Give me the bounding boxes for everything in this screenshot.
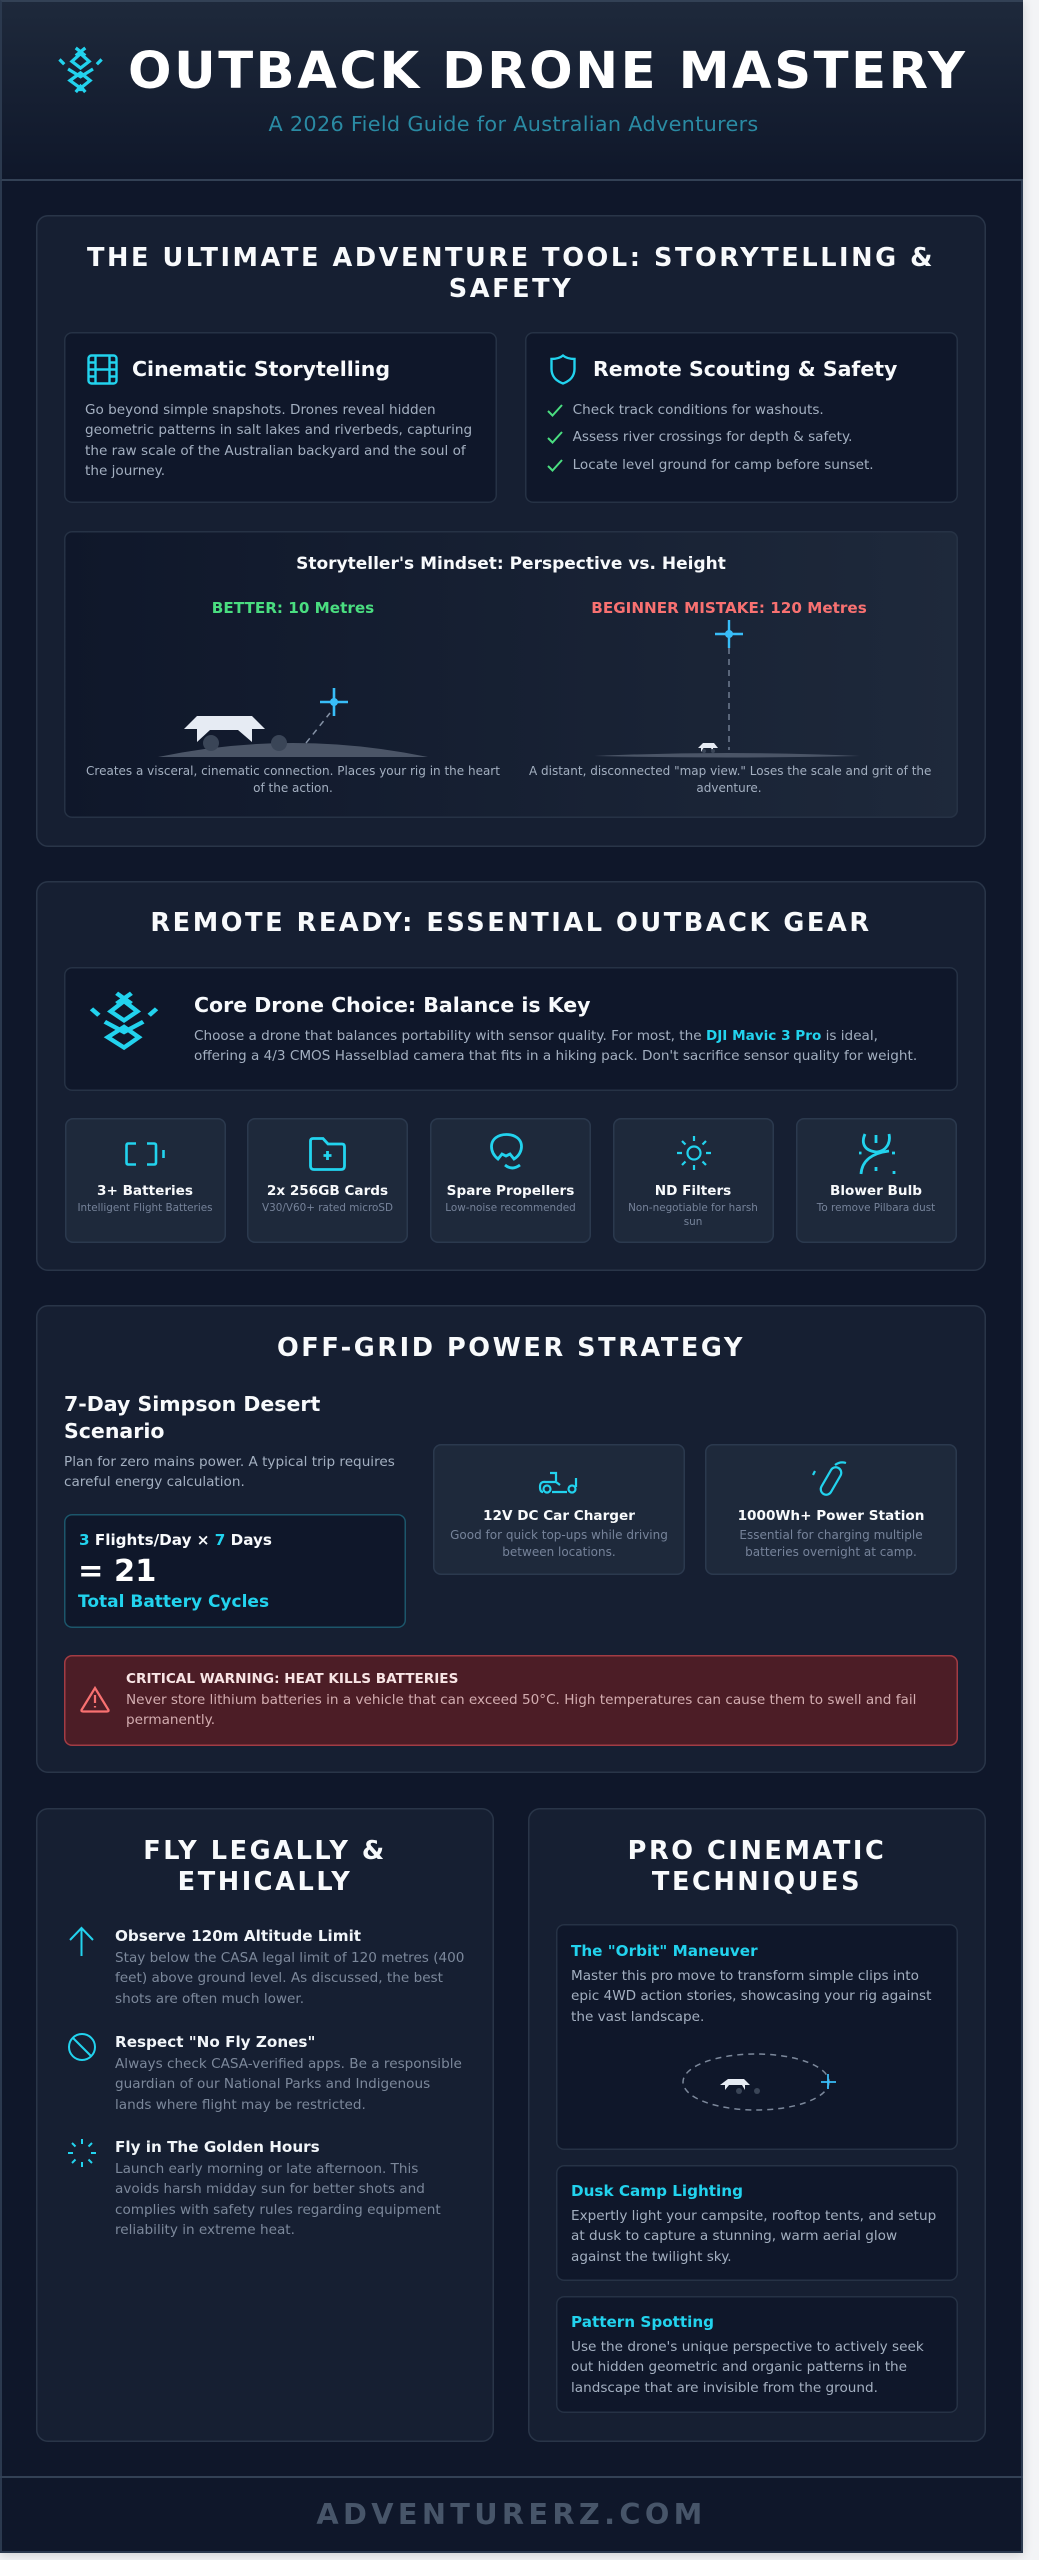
caption: better [86, 764, 500, 794]
rule heading: Fly in The Golden Hours [115, 2138, 320, 2156]
check item 2: Assess river crossings for depth & safety. [573, 429, 852, 445]
icon: blower [859, 1133, 896, 1174]
rule text: lands where flight may be restricted. [115, 2097, 366, 2113]
check item 3: Locate level ground for camp before sunset. [573, 456, 874, 472]
panel: storytelling and safety [36, 215, 986, 847]
card heading: Remote Scouting & Safety [593, 357, 897, 381]
rule text: complies with safety rules regarding equipment [115, 2202, 441, 2218]
icon: power station [812, 1461, 846, 1496]
technique text: the vast landscape. [571, 2009, 704, 2025]
technique text: epic 4WD action stories, showcasing your rig against [571, 1988, 931, 2004]
rule: altitude [69, 1926, 464, 2007]
icon: drone [90, 992, 158, 1050]
warning text: Never store lithium batteries in a vehicle that can exceed 50°C. High temperatures can cause them to swell and fail [126, 1692, 916, 1708]
rule: golden hours [68, 2138, 441, 2238]
description: between locations. [502, 1544, 616, 1558]
panel: perspective vs height [64, 531, 958, 818]
card: cinematic storytelling [64, 332, 497, 503]
technique text: out hidden geometric and organic patterns in the [571, 2359, 907, 2375]
subtitle: A 2026 Field Guide for Australian Adventurers [268, 112, 759, 136]
result: = 21 [78, 1554, 156, 1589]
icon: propeller [490, 1133, 523, 1170]
label: 12V DC Car Charger [483, 1508, 635, 1524]
rule text [115, 2161, 441, 2238]
icon: shield [550, 354, 576, 385]
rule text: Stay below the CASA legal limit of 120 metres (400 [115, 1950, 464, 1966]
callout: battery cycle calculation [64, 1514, 406, 1628]
gear: blower bulb [796, 1118, 956, 1243]
description: To remove Pilbara dust [817, 1202, 935, 1214]
card text: geometric patterns in salt lakes and riverbeds, capturing [85, 422, 472, 438]
technique text [571, 2206, 936, 2267]
technique heading: Dusk Camp Lighting [571, 2182, 743, 2200]
heading: PRO CINEMATIC [628, 1836, 886, 1866]
technique: orbit [556, 1924, 958, 2150]
label: better: BETTER: 10 Metres [212, 599, 374, 617]
icon: film [87, 354, 118, 385]
checklist [547, 402, 874, 472]
heading [87, 243, 935, 304]
rule: no fly zones [68, 2033, 462, 2113]
technique: pattern spotting [556, 2296, 958, 2413]
heading: OFF-GRID POWER STRATEGY [277, 1333, 745, 1363]
description: V30/V60+ rated microSD [262, 1202, 393, 1214]
card: remote scouting [525, 332, 958, 503]
heading: THE ULTIMATE ADVENTURE TOOL: STORYTELLING & [87, 243, 935, 273]
rule text: feet) above ground level. As discussed, the best [115, 1970, 443, 1986]
warning heading: CRITICAL WARNING: HEAT KILLS BATTERIES [126, 1671, 458, 1687]
card text: Choose a drone that balances portability with sensor quality. For most, the DJI Mavic 3 Pro is ideal, [194, 1028, 878, 1044]
label: Blower Bulb [830, 1183, 922, 1199]
description: Good for quick top-ups while driving [450, 1528, 668, 1542]
description [450, 1528, 668, 1558]
technique heading: The "Orbit" Maneuver [571, 1942, 758, 1960]
icon: up arrow [69, 1926, 94, 1956]
description: Essential for charging multiple [739, 1528, 923, 1542]
technique text: Expertly light your campsite, rooftop tents, and setup [571, 2208, 936, 2224]
icon: drone logo [58, 46, 103, 94]
icon: check [547, 431, 563, 444]
technique text: Master this pro move to transform simple clips into [571, 1968, 919, 1984]
icon: car [538, 1472, 578, 1494]
formula: 3 Flights/Day × 7 Days [79, 1531, 272, 1549]
panel: essential gear [36, 881, 986, 1271]
title: OUTBACK DRONE MASTERY [128, 40, 967, 100]
label: 1000Wh+ Power Station [738, 1508, 924, 1524]
rule text: shots are often much lower. [115, 1991, 304, 2007]
description: batteries overnight at camp. [745, 1544, 917, 1558]
scenario text: careful energy calculation. [64, 1474, 245, 1490]
card text: the raw scale of the Australian backyard and the soul of [85, 443, 466, 459]
heading: FLY LEGALLY & [143, 1836, 387, 1866]
caption: mistake [529, 764, 931, 794]
scenario heading: Scenario [64, 1418, 164, 1442]
caption: mistake: adventure. [696, 780, 762, 794]
result label: Total Battery Cycles [78, 1592, 269, 1612]
panel: pro techniques [528, 1808, 986, 2442]
heading: REMOTE READY: ESSENTIAL OUTBACK GEAR [150, 908, 872, 938]
card text: the journey. [85, 463, 165, 479]
description: Non-negotiable for harsh [628, 1202, 758, 1214]
icon: check [547, 404, 563, 417]
heading: TECHNIQUES [652, 1867, 862, 1897]
technique: dusk camp [556, 2165, 958, 2281]
technique text: against the twilight sky. [571, 2249, 732, 2265]
caption: mistake: A distant, disconnected "map view." Loses the scale and grit of the [529, 764, 931, 778]
diagram: high drone [596, 620, 858, 758]
rule text [115, 2056, 462, 2113]
description [739, 1528, 923, 1558]
technique text [571, 2337, 924, 2398]
icon: no entry [68, 2033, 96, 2061]
rule text: Launch early morning or late afternoon. This [115, 2161, 418, 2177]
icon: sun [677, 1136, 711, 1170]
diagram: orbit [676, 2049, 846, 2119]
header [0, 0, 1023, 181]
gear: batteries [64, 1118, 226, 1243]
card heading: Core Drone Choice: Balance is Key [194, 993, 591, 1017]
scenario heading [64, 1392, 320, 1442]
warning text: permanently. [126, 1712, 215, 1728]
technique text: Use the drone's unique perspective to actively seek [571, 2339, 924, 2355]
rule text: reliability in extreme heat. [115, 2222, 295, 2238]
description: Intelligent Flight Batteries [77, 1202, 213, 1214]
scenario heading: 7-Day Simpson Desert [64, 1392, 320, 1416]
footer brand: ADVENTURERZ.COM [316, 2497, 707, 2531]
scenario text [64, 1454, 395, 1490]
card heading: Cinematic Storytelling [132, 357, 390, 381]
label: 2x 256GB Cards [267, 1183, 388, 1199]
caption: better: of the action. [253, 780, 333, 794]
description: sun [684, 1216, 702, 1228]
rule heading: Observe 120m Altitude Limit [115, 1927, 361, 1945]
icon: check [547, 459, 563, 472]
card: car charger [433, 1444, 685, 1575]
technique text: landscape that are invisible from the ground. [571, 2380, 878, 2396]
rule text: Always check CASA-verified apps. Be a responsible [115, 2056, 462, 2072]
card text: Go beyond simple snapshots. Drones reveal hidden [85, 402, 436, 418]
card text [194, 1028, 917, 1064]
rule heading: Respect "No Fly Zones" [115, 2033, 315, 2051]
rule text: guardian of our National Parks and Indigenous [115, 2076, 430, 2092]
technique text [571, 1966, 931, 2027]
label: ND Filters [655, 1183, 731, 1199]
rule text: avoids harsh midday sun for better shots and [115, 2181, 425, 2197]
icon: battery [125, 1142, 165, 1166]
label: Spare Propellers [447, 1183, 574, 1199]
card text [85, 402, 472, 479]
heading [528, 1836, 986, 1897]
card: power station [705, 1444, 957, 1575]
callout: heat warning [64, 1655, 958, 1746]
heading: SAFETY [449, 274, 573, 304]
scenario text: Plan for zero mains power. A typical trip requires [64, 1454, 395, 1470]
label: mistake: BEGINNER MISTAKE: 120 Metres [591, 599, 867, 617]
icon: folder [309, 1137, 346, 1171]
gear: memory cards [247, 1118, 408, 1243]
heading: ETHICALLY [178, 1867, 352, 1897]
card text: offering a 4/3 CMOS Hasselblad camera that fits in a hiking pack. Don't sacrifice sensor quality for weight. [194, 1048, 917, 1064]
icon: sun rays [68, 2139, 96, 2167]
warning text [126, 1692, 916, 1728]
technique heading: Pattern Spotting [571, 2313, 714, 2331]
footer [0, 2476, 1023, 2553]
diagram: low drone [158, 688, 428, 757]
panel heading: Storyteller's Mindset: Perspective vs. Height [296, 554, 726, 574]
gear: ND filters [612, 1118, 774, 1243]
gear: propellers [430, 1118, 591, 1243]
description: Low-noise recommended [445, 1202, 576, 1214]
check item 1: Check track conditions for washouts. [573, 402, 824, 418]
icon: warning [80, 1686, 110, 1713]
panel: power strategy [36, 1305, 986, 1773]
label: 3+ Batteries [97, 1183, 193, 1199]
technique text: at dusk to capture a stunning, warm aerial glow [571, 2228, 897, 2244]
rule text [115, 1950, 464, 2007]
description [628, 1202, 758, 1228]
caption: better: Creates a visceral, cinematic connection. Places your rig in the heart [86, 764, 500, 778]
heading [143, 1836, 387, 1897]
card: core drone choice [64, 967, 958, 1091]
panel: fly legally [36, 1808, 494, 2442]
